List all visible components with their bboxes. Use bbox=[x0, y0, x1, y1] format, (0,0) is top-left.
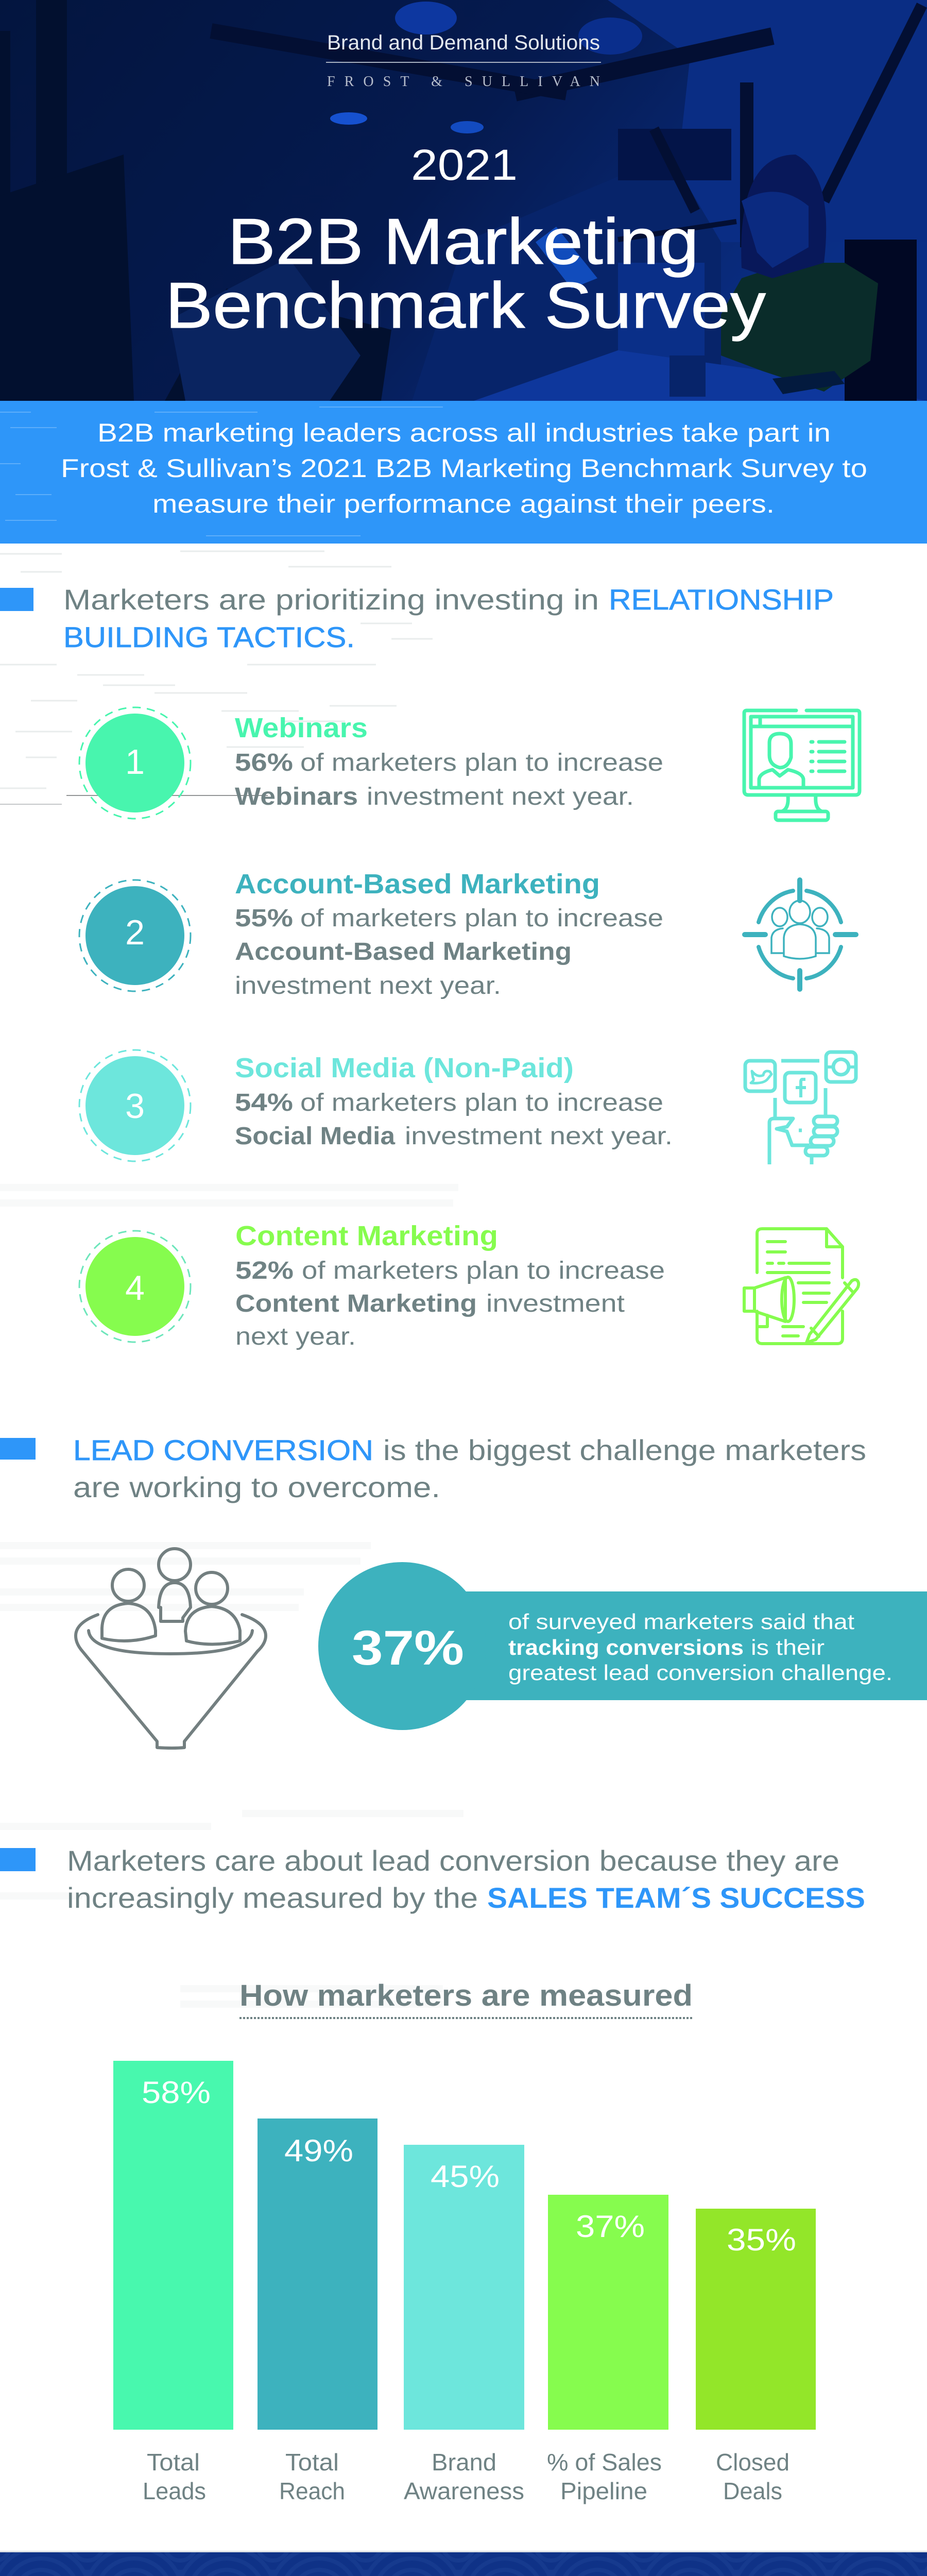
tactic 1 text: of marketers plan to increase bbox=[300, 749, 663, 776]
number badge 2 bbox=[79, 880, 191, 991]
section heading: lead conversion: are working to overcome. bbox=[73, 1471, 440, 1503]
bar: total leads 58%: Leads bbox=[143, 2478, 206, 2504]
intro band bbox=[0, 401, 927, 544]
bar: brand awareness 45% bbox=[404, 2145, 524, 2504]
icon: target audience bbox=[745, 880, 856, 989]
section heading: sales team's success bbox=[0, 1844, 865, 1914]
tactic 4 text: investment bbox=[486, 1290, 625, 1317]
callout: 37% tracking conversions: greatest lead conversion challenge. bbox=[508, 1660, 892, 1685]
tactic 2 text: Account-Based Marketing bbox=[235, 869, 600, 900]
section marker bbox=[0, 1438, 36, 1460]
bar: closed deals 35%: 35% bbox=[727, 2223, 796, 2257]
bar: brand awareness 45%: Brand bbox=[432, 2449, 496, 2476]
number badge 4 bbox=[79, 1231, 191, 1342]
number badge 1 bbox=[79, 707, 191, 819]
tactic 2 text bbox=[235, 869, 663, 999]
section heading: relationship building tactics: RELATIONSHIP bbox=[609, 583, 834, 616]
panel: tactic 1 webinars bbox=[79, 707, 860, 820]
section heading: lead conversion: LEAD CONVERSION bbox=[73, 1434, 373, 1466]
bar: total leads 58%: 58% bbox=[142, 2075, 211, 2110]
number badge 4: 4 bbox=[125, 1268, 145, 1308]
tactic 4 text: Content Marketing bbox=[235, 1290, 477, 1317]
title: B2B Marketing bbox=[228, 205, 699, 278]
title bbox=[165, 141, 766, 342]
section marker bbox=[0, 588, 33, 611]
callout: 37% tracking conversions bbox=[318, 1562, 927, 1730]
tactic 4 text bbox=[235, 1221, 665, 1350]
chart title: How marketers are measured bbox=[239, 1979, 693, 2012]
section marker bbox=[0, 1848, 36, 1871]
tactic 3 text: Social Media bbox=[235, 1123, 395, 1150]
icon: content document with megaphone and pencil bbox=[744, 1229, 859, 1344]
panel: tactic 3 social media bbox=[79, 1050, 856, 1164]
tactic 3 text: 54% bbox=[235, 1089, 293, 1116]
tactic 2 text: 55% bbox=[235, 905, 293, 932]
hero banner with photo background bbox=[0, 0, 927, 401]
bar: total reach 49%: Reach bbox=[279, 2478, 345, 2504]
icon: funnel with people bbox=[76, 1549, 266, 1748]
tactic 2 text: Account-Based Marketing bbox=[235, 938, 572, 965]
section heading: sales team's success: Marketers care about lead conversion because they are bbox=[67, 1844, 839, 1877]
bar: total leads 58%: Total bbox=[147, 2449, 200, 2476]
bar: % of sales pipeline 37%: Pipeline bbox=[560, 2478, 647, 2504]
panel: hot topics bbox=[0, 2551, 927, 2576]
icon: webinar monitor bbox=[744, 710, 860, 820]
tactic 1 text: Webinars bbox=[235, 783, 358, 810]
bar: total reach 49%: 49% bbox=[284, 2133, 353, 2168]
tactic 4 text: 52% bbox=[235, 1257, 294, 1284]
logo: Brand and Demand Solutions, Frost & Sullivan: Brand and Demand Solutions bbox=[327, 31, 600, 54]
intro band: measure their performance against their peers. bbox=[152, 489, 775, 518]
callout: 37% tracking conversions: of surveyed marketers said that bbox=[508, 1609, 854, 1634]
section heading: relationship building tactics: Marketers are prioritizing investing in bbox=[63, 583, 599, 616]
logo: Brand and Demand Solutions, Frost & Sullivan: FROST & SULLIVAN bbox=[327, 74, 600, 90]
section heading: relationship building tactics: BUILDING TACTICS. bbox=[63, 621, 355, 653]
bar: % of sales pipeline 37%: % of Sales bbox=[547, 2449, 662, 2476]
section heading: sales team's success: SALES TEAM´S SUCCESS bbox=[487, 1882, 865, 1914]
number badge 3: 3 bbox=[125, 1087, 145, 1126]
bar: closed deals 35%: Closed bbox=[716, 2449, 789, 2476]
tactic 4 text: next year. bbox=[235, 1323, 356, 1350]
tactic 1 text: investment next year. bbox=[367, 783, 634, 810]
tactic 3 text bbox=[235, 1053, 673, 1150]
bar: % of sales pipeline 37%: 37% bbox=[576, 2209, 645, 2244]
tactic 2 text: investment next year. bbox=[235, 972, 501, 999]
title: 2021 bbox=[411, 141, 518, 189]
bar: brand awareness 45%: 45% bbox=[431, 2159, 500, 2194]
bar chart: how marketers are measured bbox=[113, 1979, 816, 2504]
intro band: Frost & Sullivan’s 2021 B2B Marketing Benchmark Survey to bbox=[61, 454, 867, 483]
section heading: sales team's success: increasingly measured by the bbox=[67, 1882, 478, 1914]
tactic 4 text: of marketers plan to increase bbox=[302, 1257, 665, 1284]
section heading: lead conversion bbox=[0, 1434, 866, 1503]
bar: total leads 58% bbox=[113, 2061, 233, 2504]
bar: total reach 49%: Total bbox=[285, 2449, 339, 2476]
bar: total reach 49% bbox=[258, 2119, 377, 2504]
tactic 4 text: Content Marketing bbox=[235, 1221, 498, 1251]
bar: % of sales pipeline 37% bbox=[547, 2195, 668, 2504]
callout: 37% tracking conversions: tracking conversions bbox=[508, 1635, 744, 1659]
callout: 37% tracking conversions: is their bbox=[751, 1635, 825, 1659]
section heading: relationship building tactics bbox=[0, 583, 834, 653]
bar: closed deals 35% bbox=[696, 2209, 816, 2504]
intro band: B2B marketing leaders across all industries take part in bbox=[97, 418, 831, 447]
section heading: lead conversion: is the biggest challenge marketers bbox=[383, 1434, 866, 1466]
callout: 37% tracking conversions: 37% bbox=[352, 1621, 464, 1675]
tactic 3 text: investment next year. bbox=[405, 1123, 673, 1150]
tactic 1 text bbox=[235, 713, 663, 810]
panel: tactic 2 account-based marketing bbox=[79, 869, 856, 999]
bar: brand awareness 45%: Awareness bbox=[404, 2478, 524, 2504]
icon: social networks in hand bbox=[745, 1052, 856, 1164]
tactic 1 text: Webinars bbox=[235, 713, 368, 743]
tactic 3 text: of marketers plan to increase bbox=[300, 1089, 663, 1116]
logo: Brand and Demand Solutions, Frost & Sullivan bbox=[326, 31, 601, 90]
number badge 2: 2 bbox=[125, 913, 145, 952]
tactic 2 text: of marketers plan to increase bbox=[300, 905, 663, 932]
number badge 1: 1 bbox=[125, 742, 145, 782]
tactic 3 text: Social Media (Non-Paid) bbox=[235, 1053, 574, 1083]
number badge 3 bbox=[79, 1050, 191, 1161]
tactic 1 text: 56% bbox=[235, 749, 293, 776]
bar: closed deals 35%: Deals bbox=[723, 2478, 782, 2504]
panel: tactic 4 content marketing bbox=[79, 1221, 859, 1350]
title: Benchmark Survey bbox=[165, 269, 766, 342]
